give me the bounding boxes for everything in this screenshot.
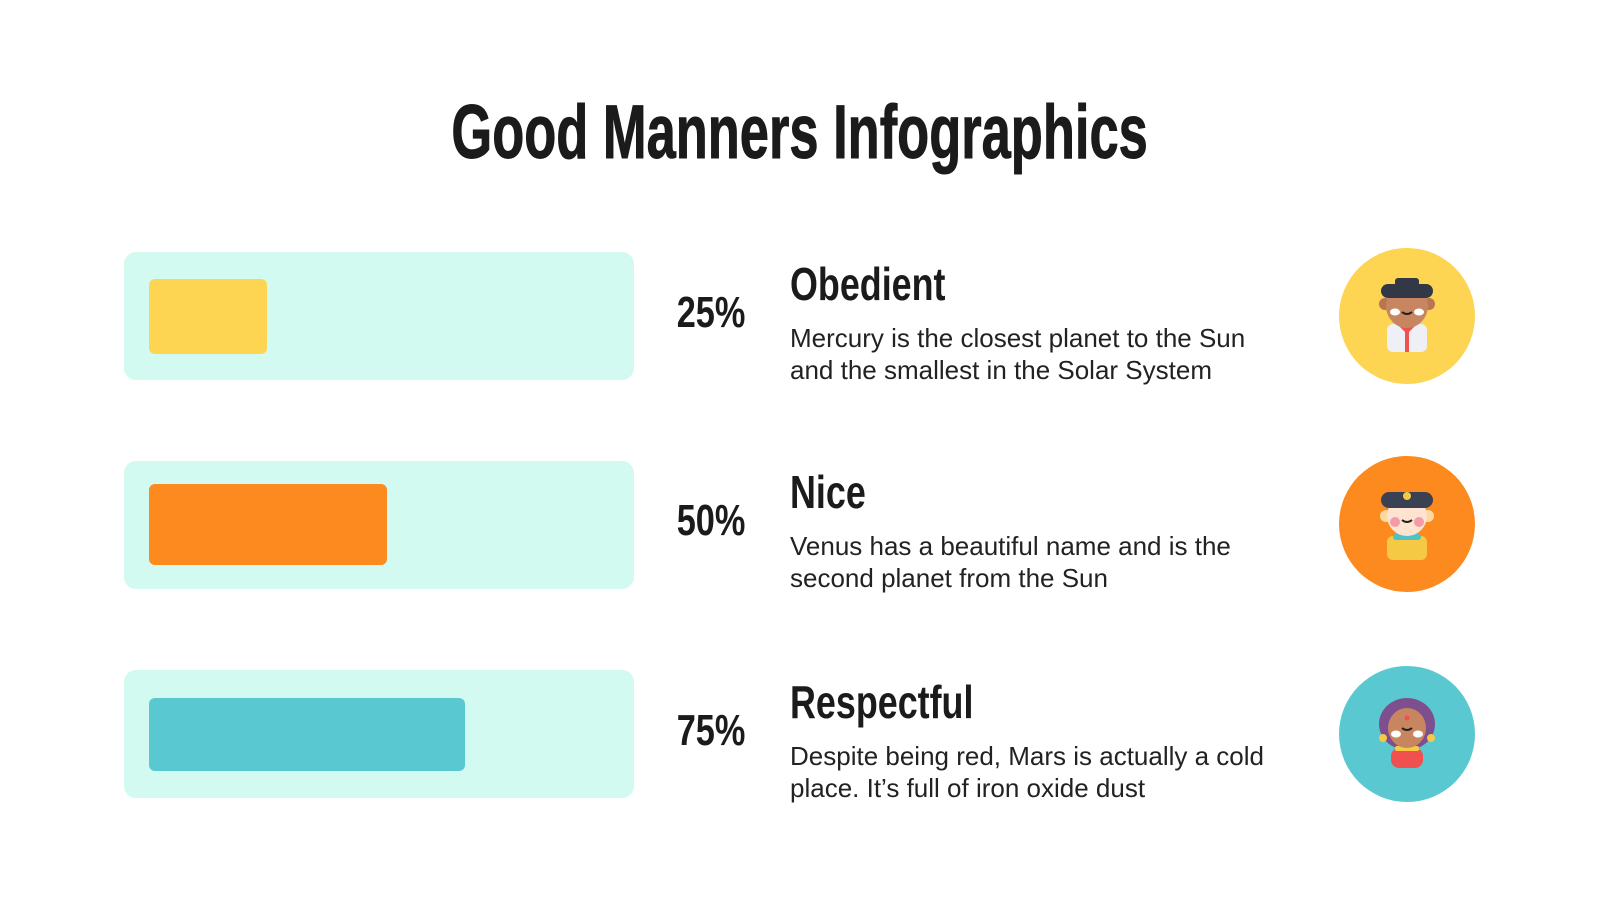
- heading: Respectful: Respectful: [790, 676, 973, 728]
- row 2: nice: [124, 456, 1475, 593]
- bar track 25%: [124, 252, 634, 380]
- description 3: Despite being red, Mars is actually a cold place. It’s full of iron oxide dust: [790, 741, 1264, 803]
- row 3: respectful: [124, 666, 1475, 803]
- bar track 75%: [124, 670, 634, 798]
- row 1: obedient: [124, 248, 1475, 385]
- description 1: Mercury is the closest planet to the Sun and the smallest in the Solar System: [790, 323, 1245, 385]
- percent 50%: 50%: [677, 496, 745, 545]
- description 2: Venus has a beautiful name and is the second planet from the Sun: [790, 531, 1231, 593]
- percent 75%: 75%: [677, 706, 745, 755]
- title: Good Manners Infographics: [452, 90, 1148, 175]
- icon: boy avatar yellow: [1339, 248, 1475, 384]
- bar track 50%: [124, 461, 634, 589]
- icon: girl avatar teal: [1339, 666, 1475, 802]
- icon: boy with hat orange: [1339, 456, 1475, 592]
- heading: Nice: Nice: [790, 466, 866, 518]
- heading: Obedient: Obedient: [790, 258, 945, 310]
- percent 25%: 25%: [677, 288, 745, 337]
